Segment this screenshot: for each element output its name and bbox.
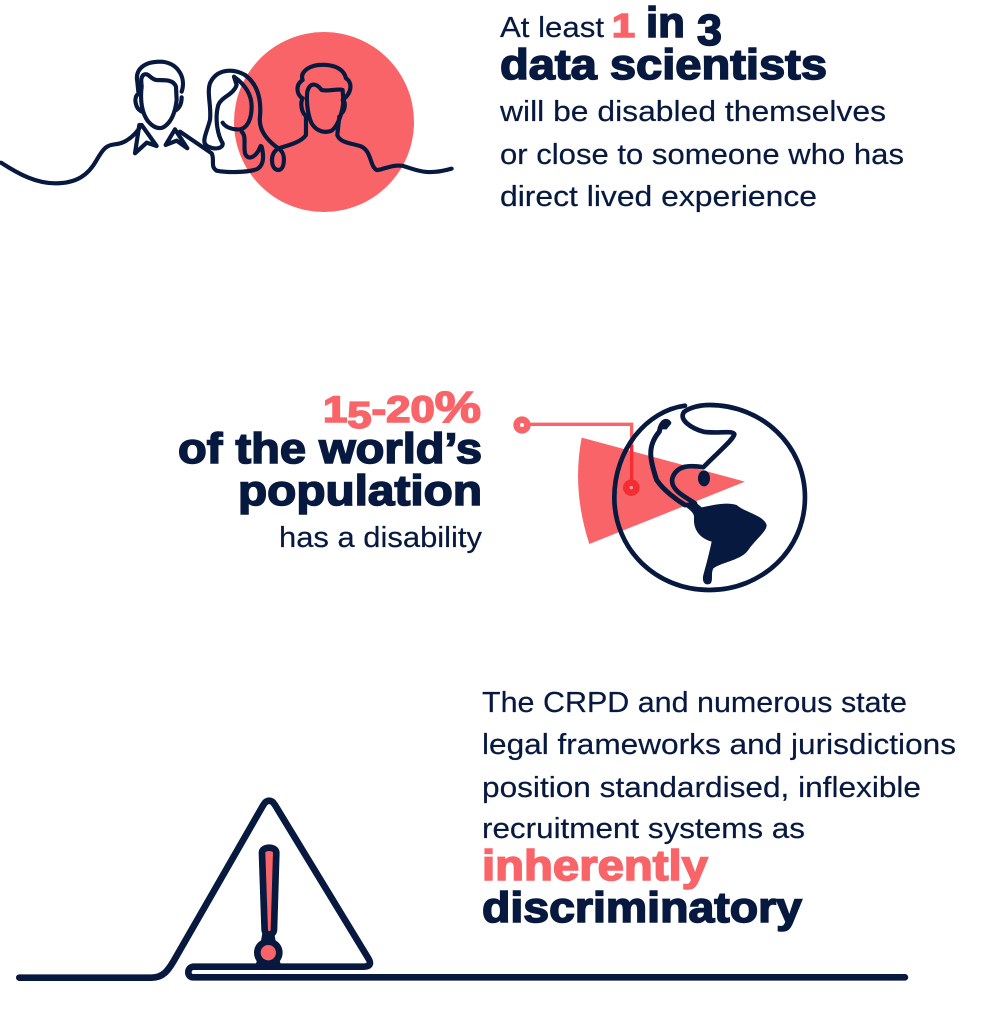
- body line two: legal frameworks and jurisdictions: [482, 729, 956, 761]
- globe outline and continents: [614, 405, 805, 590]
- exclamation neck and foot: [255, 932, 282, 967]
- percentage: 1: [323, 389, 344, 430]
- continuous line drawing of people: [1, 62, 452, 183]
- red sector: [578, 438, 745, 544]
- exclamation bar: [262, 848, 276, 934]
- number: 1: 1: [612, 7, 635, 44]
- body line one: will be disabled themselves: [499, 96, 886, 128]
- percentage: -20: [372, 389, 435, 430]
- illustration: three people line drawing: [1, 32, 452, 212]
- percentage: %: [435, 383, 481, 432]
- text block: CRPD statement: [482, 687, 956, 932]
- exclamation dot: [257, 942, 279, 964]
- panel: world population statistic: [178, 383, 805, 590]
- heading line two: population: [238, 467, 482, 515]
- percentage: 5: [347, 395, 372, 436]
- callout pointer: [517, 420, 636, 493]
- heading line one: of the world’s: [178, 425, 482, 473]
- illustration: warning triangle line drawing: [19, 801, 905, 978]
- body line three: position standardised, inflexible: [482, 772, 921, 804]
- emphasis: discriminatory: discriminatory: [482, 884, 802, 932]
- illustration: globe with callout sector: [517, 405, 805, 590]
- red circle behind people: [234, 32, 414, 212]
- text block: 15-20% of the world's population: [178, 383, 483, 554]
- body line: has a disability: [279, 522, 483, 554]
- triangle and base line: [19, 801, 905, 978]
- lead in: at least: At least: [500, 12, 604, 44]
- body line one: The CRPD and numerous state: [482, 687, 907, 719]
- body line four: recruitment systems as: [482, 813, 805, 845]
- heading: in 3: in: [646, 0, 684, 47]
- text block: at least 1 in 3: [499, 0, 904, 213]
- body line two: or close to someone who has: [500, 139, 904, 171]
- emphasis: inherently: inherently: [482, 842, 708, 890]
- panel: legal frameworks statement: [19, 687, 956, 978]
- body line three: direct lived experience: [500, 181, 817, 213]
- panel: data scientists statistic: [1, 0, 904, 213]
- heading: data scientists: data scientists: [500, 41, 827, 89]
- heading: in 3: 3: [697, 6, 722, 55]
